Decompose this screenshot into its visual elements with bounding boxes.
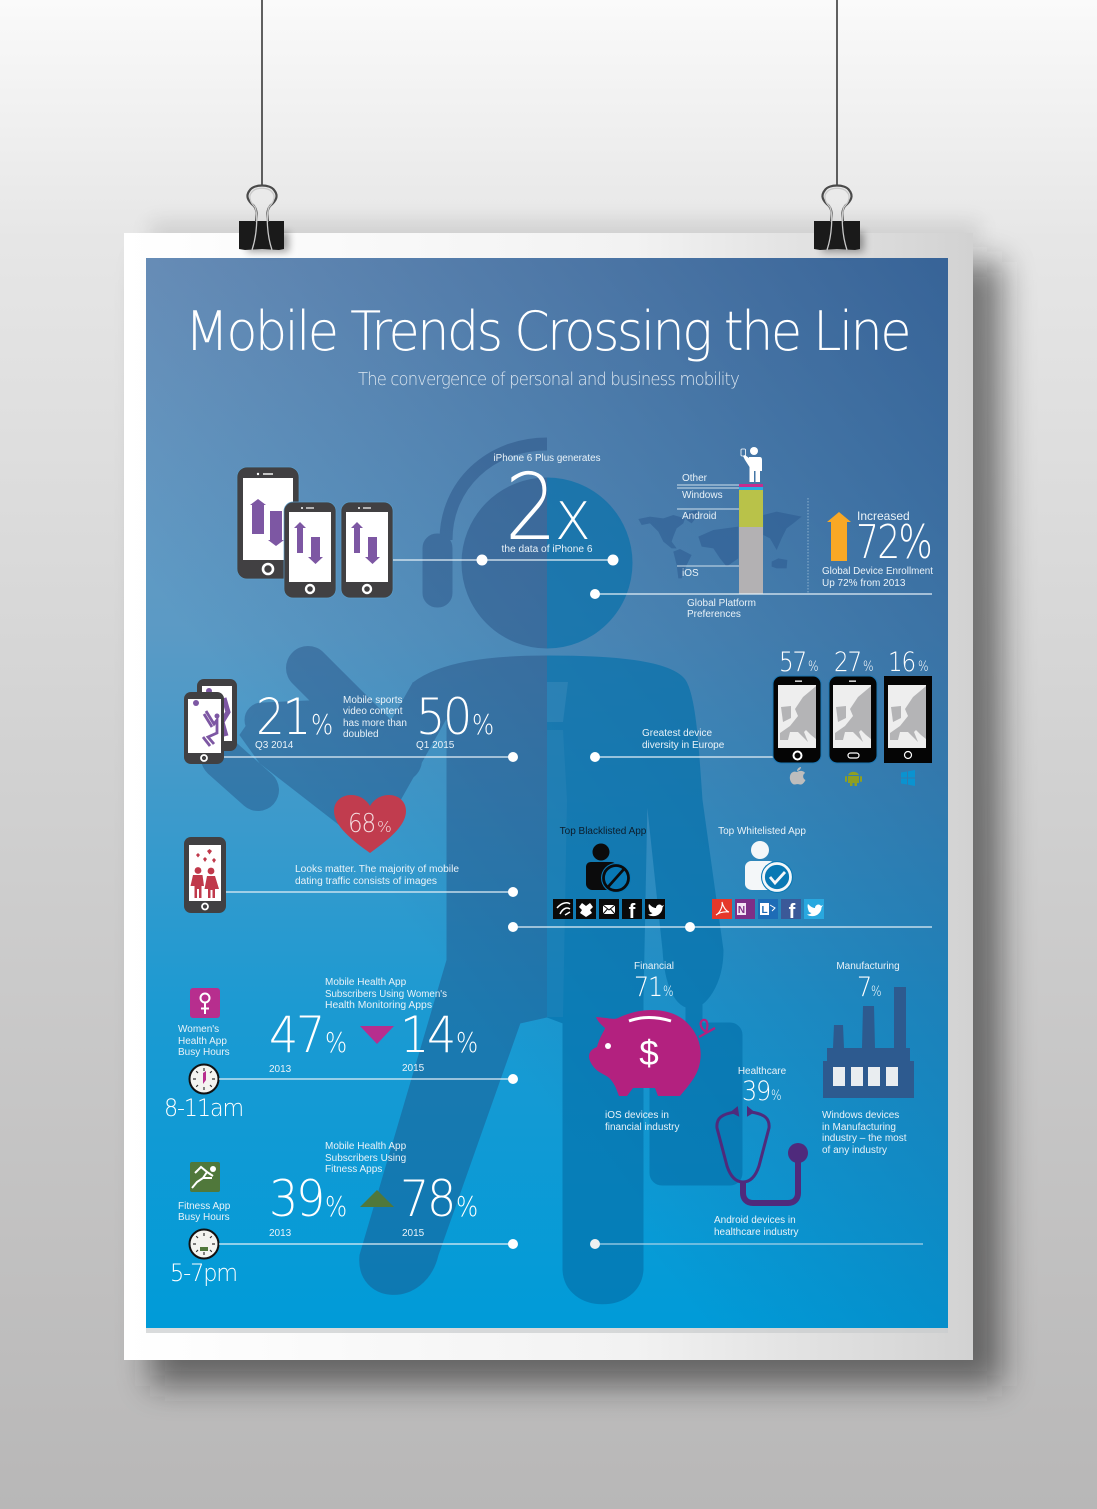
- stats: Europe device share phones: %: [918, 659, 928, 675]
- panel: top blacklisted app: f: [629, 901, 636, 923]
- stat: sports video 21 to 50 percent: 50: [416, 688, 470, 746]
- stats: Europe device share phones: 27: [834, 647, 861, 678]
- stat: manufacturing 7 percent: Manufacturing: [836, 961, 900, 972]
- stat: manufacturing 7 percent: Windows devices: [822, 1110, 899, 1121]
- stat: sports video 21 to 50 percent: doubled: [343, 729, 379, 740]
- line: women's health connector: [219, 1074, 518, 1084]
- stat: manufacturing 7 percent: %: [871, 984, 881, 1000]
- icon: phones with sports figure: [184, 679, 237, 764]
- stat: 2x the data: iPhone 6 Plus generates: [494, 453, 600, 464]
- chart: global platform preferences: iOS: [682, 568, 699, 579]
- stat: women's health 47 to 14 percent: 14: [400, 1006, 454, 1064]
- text: dating traffic: [226, 864, 518, 897]
- stat: healthcare 39 percent: %: [771, 1088, 781, 1104]
- line: Europe diversity connector: Greatest device: [642, 728, 712, 739]
- stat: women's health 47 to 14 percent: %: [325, 1026, 346, 1059]
- icon: heart 68 percent: %: [377, 818, 392, 836]
- icon: android: [845, 772, 862, 786]
- stat: fitness apps 39 to 78 percent: Mobile Health App: [325, 1141, 407, 1152]
- icon: apple: [790, 767, 806, 785]
- icon: three phones with data arrows: [237, 467, 393, 598]
- panel: top whitelisted app: N: [738, 905, 745, 916]
- stat: fitness apps 39 to 78 percent: 2015: [402, 1228, 425, 1239]
- icon: right binder clip: [814, 186, 860, 250]
- stats: Europe device share phones: [773, 647, 932, 763]
- stat: sports video 21 to 50 percent: video content: [343, 706, 403, 717]
- stat: fitness apps 39 to 78 percent: 78: [400, 1170, 454, 1228]
- text: dating traffic: Looks matter. The majority of mobile: [295, 864, 459, 875]
- icon: stethoscope: [717, 1108, 808, 1203]
- line: data connector: [393, 554, 618, 566]
- line: industry connector: [590, 1239, 923, 1249]
- stat: financial 71 percent: Financial: [634, 961, 674, 972]
- stat: healthcare 39 percent: Healthcare: [738, 1066, 787, 1077]
- stat: financial 71 percent: financial industry: [605, 1122, 679, 1133]
- panel: top whitelisted app: Top Whitelisted App: [718, 826, 806, 837]
- text: fitness busy hours: Busy Hours: [178, 1212, 230, 1223]
- stat: women's health 47 to 14 percent: Mobile Health App: [325, 977, 407, 988]
- text: women's busy hours: [178, 1024, 230, 1058]
- stats: Europe device share phones: %: [808, 659, 818, 675]
- line: platform baseline: Global Platform: [687, 598, 756, 609]
- panel: top blacklisted app: Top Blacklisted App: [560, 826, 647, 837]
- stat: 72 percent enrollment: Global Device Enrollment: [822, 566, 933, 577]
- stat: healthcare 39 percent: Android devices in: [714, 1215, 796, 1226]
- stat: sports video 21 to 50 percent: 21: [256, 688, 309, 746]
- stat: sports video 21 to 50 percent: Q1 2015: [416, 740, 455, 751]
- stats: Europe device share phones: 16: [888, 647, 915, 678]
- icon: factory: [823, 987, 914, 1098]
- stat: fitness apps 39 to 78 percent: 2013: [269, 1228, 292, 1239]
- line: fitness connector: [219, 1239, 518, 1249]
- icon: person holding phone: [741, 447, 762, 482]
- silhouette figure with headset: [222, 444, 742, 1304]
- stat: financial 71 percent: iOS devices in: [605, 1110, 669, 1121]
- stat: financial 71 percent: %: [663, 984, 673, 1000]
- icon: fitness app: [190, 1162, 220, 1192]
- stat: manufacturing 7 percent: in Manufacturing: [822, 1122, 896, 1133]
- stat: fitness apps 39 to 78 percent: 39: [269, 1170, 323, 1228]
- icon: world map: [638, 510, 802, 578]
- text: women's busy hours: Women's: [178, 1024, 219, 1035]
- line: sports connector: [224, 752, 518, 762]
- chart: global platform preferences: [677, 473, 763, 594]
- stat: women's health 47 to 14 percent: 2015: [402, 1063, 425, 1074]
- text: fitness busy hours: [178, 1201, 231, 1223]
- panel shadow strip: [146, 1328, 948, 1333]
- stat: financial 71 percent: 71: [634, 972, 662, 1003]
- stat: financial 71 percent: [605, 961, 679, 1133]
- stat: women's health 47 to 14 percent: 2013: [269, 1064, 292, 1075]
- icon: piggy bank: [589, 1010, 715, 1096]
- stat: women's health 47 to 14 percent: [269, 977, 477, 1075]
- panel: top whitelisted app: [712, 826, 824, 923]
- stat: healthcare 39 percent: 39: [742, 1076, 770, 1107]
- stat: women's health 47 to 14 percent: Subscribers Using Women's: [325, 989, 447, 1000]
- stat: fitness apps 39 to 78 percent: Subscribers Using: [325, 1153, 406, 1164]
- stat: 2x the data: 2: [505, 454, 553, 561]
- stat: fitness apps 39 to 78 percent: %: [456, 1190, 477, 1223]
- stat: sports video 21 to 50 percent: has more than: [343, 718, 407, 729]
- icon: clock morning: [190, 1064, 218, 1094]
- clip shadows: [247, 232, 864, 252]
- icon: left binder clip: [239, 186, 284, 250]
- chart: global platform preferences: Android: [682, 511, 716, 522]
- stat: sports video 21 to 50 percent: [255, 688, 493, 751]
- stat: sports video 21 to 50 percent: Q3 2014: [255, 740, 294, 751]
- line: Europe diversity connector: [590, 728, 775, 762]
- stats: Europe device share phones: 57: [779, 647, 806, 678]
- stat: manufacturing 7 percent: 7: [857, 972, 871, 1003]
- blue panel: [146, 258, 948, 1328]
- line: Europe diversity connector: diversity in Europe: [642, 740, 725, 751]
- title: Mobile Trends Crossing the Line: [185, 300, 909, 363]
- icon: heart 68 percent: [334, 795, 406, 853]
- stat: women's health 47 to 14 percent: Health Monitoring Apps: [325, 1000, 432, 1011]
- stat: sports video 21 to 50 percent: Mobile sports: [343, 695, 402, 706]
- stat: sports video 21 to 50 percent: %: [472, 708, 493, 741]
- panel: top blacklisted app: [553, 826, 665, 923]
- stat: 72 percent enrollment: [822, 509, 933, 589]
- text: fitness busy hours: Fitness App: [178, 1201, 231, 1212]
- stat: fitness apps 39 to 78 percent: %: [325, 1190, 346, 1223]
- label: 8-11am: 8-11am: [164, 1094, 243, 1122]
- poster shadow: [150, 222, 1002, 1386]
- panel: top whitelisted app: L: [761, 905, 768, 916]
- stat: healthcare 39 percent: healthcare industry: [714, 1227, 798, 1238]
- stat: sports video 21 to 50 percent: %: [311, 708, 332, 741]
- chart: global platform preferences: Other: [682, 473, 708, 484]
- stat: women's health 47 to 14 percent: 47: [269, 1006, 323, 1064]
- stat: manufacturing 7 percent: [822, 961, 907, 1156]
- stats: Europe device share phones: %: [863, 659, 873, 675]
- line: apps connector: [508, 922, 932, 932]
- subtitle: The convergence of personal and business mobility: [358, 369, 739, 390]
- stat: fitness apps 39 to 78 percent: [269, 1141, 477, 1239]
- text: women's busy hours: Health App: [178, 1036, 227, 1047]
- line: platform baseline: Preferences: [687, 609, 741, 620]
- hanging strings: [262, 0, 837, 186]
- icon: windows: [901, 770, 915, 786]
- line: platform baseline: [590, 498, 932, 620]
- icon: clock evening: [190, 1230, 218, 1258]
- icon: piggy bank: $: [639, 1034, 659, 1073]
- stat: 72 percent enrollment: Up 72% from 2013: [822, 578, 906, 589]
- text: women's busy hours: Busy Hours: [178, 1047, 230, 1058]
- stat: 2x the data: [494, 453, 600, 561]
- stat: 2x the data: X: [555, 492, 588, 552]
- stat: 2x the data: the data of iPhone 6: [502, 544, 593, 555]
- stat: manufacturing 7 percent: of any industry: [822, 1145, 887, 1156]
- paper sheet: [124, 233, 973, 1360]
- stat: manufacturing 7 percent: industry – the most: [822, 1133, 907, 1144]
- label: 5-7pm: 5-7pm: [170, 1259, 237, 1287]
- panel: top whitelisted app: f: [789, 901, 796, 923]
- stat: 72 percent enrollment: 72%: [856, 515, 931, 569]
- stat: women's health 47 to 14 percent: %: [456, 1026, 477, 1059]
- stat: fitness apps 39 to 78 percent: Fitness Apps: [325, 1164, 382, 1175]
- icon: heart 68 percent: 68: [348, 809, 375, 839]
- stat: 72 percent enrollment: Increased: [857, 509, 910, 523]
- stat: healthcare 39 percent: [714, 1066, 798, 1238]
- text: dating traffic: dating traffic consists of images: [295, 876, 437, 887]
- icon: phone with couple: [184, 837, 226, 913]
- icon: women's health app: [190, 988, 220, 1018]
- chart: global platform preferences: Windows: [682, 490, 723, 501]
